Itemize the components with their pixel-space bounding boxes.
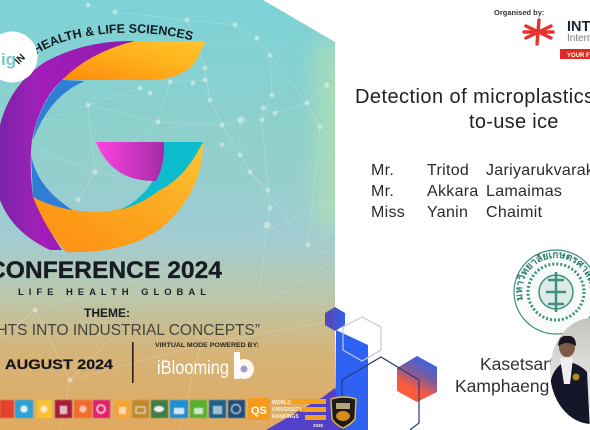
logo: white circle badge: ig	[1, 50, 16, 69]
sustainable development goal icons	[0, 400, 245, 418]
logo: organiser	[524, 19, 590, 59]
presenter suit	[550, 362, 590, 424]
author list: Lamaimas	[486, 183, 562, 200]
QS world university rankings logo: QS	[251, 405, 267, 417]
network pattern	[0, 5, 335, 430]
logo: white circle badge: IN	[13, 52, 28, 67]
author list	[371, 162, 590, 221]
university seal	[513, 249, 590, 335]
icon: iBlooming b	[234, 352, 254, 379]
QS world university rankings logo: RANKINGS	[272, 414, 299, 420]
logo: large G emblem	[0, 41, 206, 252]
university shield crest	[331, 397, 356, 428]
curved heading: health and life sciences: INT. HEALTH & LIFE SCIENCES	[36, 24, 193, 54]
blue upper inner band	[33, 80, 85, 140]
hexagon decoration group	[266, 307, 437, 430]
presentation title	[355, 86, 590, 133]
blue-red hexagon	[397, 356, 437, 402]
logo: white circle badge	[0, 32, 38, 82]
network nodes	[32, 2, 330, 382]
purple outer band of G	[0, 41, 135, 250]
QS world university rankings logo: UNIVERSITY	[272, 407, 303, 413]
author list: Mr.	[371, 162, 394, 179]
outlined hexagon	[343, 317, 381, 361]
author list: Miss	[371, 204, 405, 221]
blue lower inner band	[31, 155, 76, 212]
author list: Chaimit	[486, 204, 543, 221]
presenter shirt	[560, 358, 573, 384]
presenter photo	[550, 318, 590, 430]
author list: Akkara	[427, 183, 479, 200]
panel: conference poster background	[0, 0, 348, 430]
magenta half disc	[96, 142, 164, 181]
purple corner	[266, 388, 345, 430]
navy hexagon outline	[342, 357, 419, 430]
QS world university rankings logo: 2025	[313, 423, 324, 428]
orange top arm	[62, 41, 206, 80]
university name	[455, 354, 590, 396]
conference date: AUGUST 2024	[5, 356, 113, 372]
author list: Yanin	[427, 204, 468, 221]
QS world university rankings logo	[248, 398, 326, 428]
blue band	[335, 330, 368, 430]
QS world university rankings logo: WORLD	[272, 400, 291, 406]
author list: Tritod	[427, 162, 469, 179]
icon: red star mark	[524, 20, 553, 44]
presentation title: to-use ice	[469, 111, 559, 133]
iBlooming wordmark: iBlooming	[157, 358, 229, 379]
subtitle: life health global: LIFE HEALTH GLOBAL	[18, 287, 206, 298]
presenter head	[559, 343, 575, 357]
organised by label: Organised by:	[494, 8, 544, 17]
teal wedge	[120, 142, 203, 210]
presenter badge	[572, 374, 580, 380]
author list: Mr.	[371, 183, 394, 200]
orange bottom arm	[33, 143, 203, 252]
purple hexagon	[325, 307, 345, 331]
virtual mode label: VIRTUAL MODE POWERED BY:	[155, 343, 259, 349]
theme label: THEME:	[84, 306, 130, 320]
vertical divider	[132, 342, 134, 383]
